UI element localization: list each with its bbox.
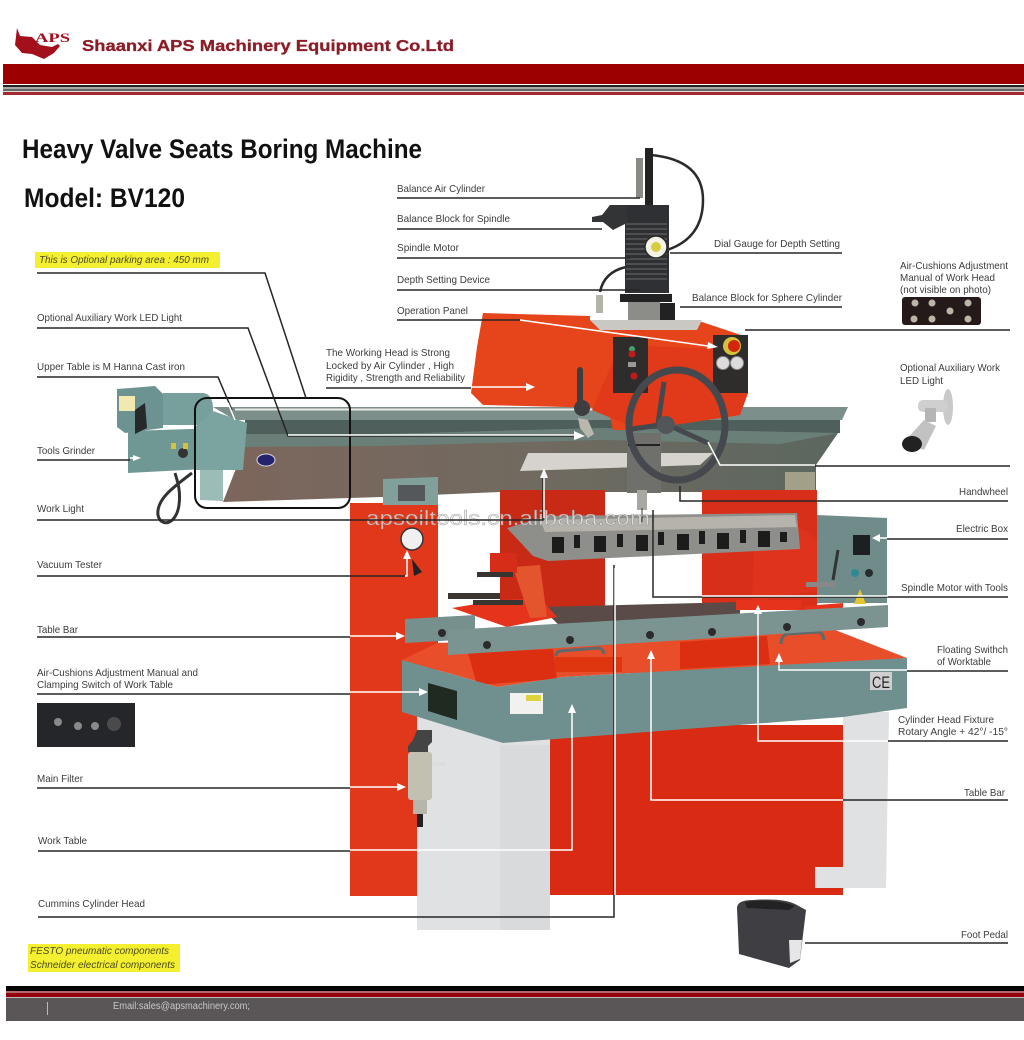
label: cummins cylinder head xyxy=(38,565,615,917)
label: LED light second line: LED Light xyxy=(900,375,943,387)
label: optional LED light: Optional Auxiliary Work xyxy=(900,362,1001,374)
right labels and leaders xyxy=(647,238,1010,943)
icon: LED work light xyxy=(902,389,953,452)
work table xyxy=(402,628,907,930)
label: air cushions worktable: Air-Cushions Adjustment Manual and xyxy=(37,667,198,679)
label: spindle motor with tools: Spindle Motor with Tools xyxy=(901,582,1008,594)
label: tools grinder: Tools Grinder xyxy=(37,445,95,457)
icon: worktable switch panel xyxy=(37,703,135,747)
label: air cushions work head: Air-Cushions Adjustment xyxy=(900,260,1008,272)
top labels and leaders xyxy=(326,183,718,391)
label: foot pedal: Foot Pedal xyxy=(961,929,1008,941)
cylinder head fixture xyxy=(448,521,843,627)
label: spindle motor with tools xyxy=(653,510,1008,597)
icon: work head switch panel xyxy=(902,297,981,325)
label: cylinder head fixture: Cylinder Head Fixture xyxy=(898,714,994,726)
label: table bar left: Table Bar xyxy=(37,624,78,636)
label: operation panel xyxy=(397,305,718,349)
red columns xyxy=(350,477,817,896)
dial gauge xyxy=(645,236,667,258)
leader: LED light xyxy=(708,442,1010,466)
label: electric box: Electric Box xyxy=(956,523,1009,535)
label: work light: Work Light xyxy=(37,503,84,515)
label: handwheel xyxy=(680,486,1008,501)
main filter xyxy=(408,730,446,827)
label: floating switch: of Worktable xyxy=(937,656,991,668)
label: cylinder head fixture xyxy=(754,605,1008,741)
label: balance block sphere cylinder: Balance Block for Sphere Cylinder xyxy=(692,292,842,304)
components callout: FESTO pneumatic components xyxy=(30,945,170,957)
label: working head: Rigidity , Strength and Reliability xyxy=(326,372,466,384)
left labels and leaders xyxy=(28,252,615,972)
label: air cushions work head: Manual of Work Head xyxy=(900,272,995,284)
label: air cushions worktable xyxy=(37,667,428,696)
label: LED light xyxy=(37,312,585,440)
title: Heavy Valve Seats Boring Machine xyxy=(22,134,422,164)
parking area callout xyxy=(35,252,306,398)
label: air cushions worktable: Clamping Switch of Work Table xyxy=(37,679,173,691)
components callout: Schneider electrical components xyxy=(30,959,176,971)
footer band xyxy=(6,986,1024,1021)
label: floating switch: Floating Swithch xyxy=(937,644,1008,656)
footer email: Email:sales@apsmachinery.com; xyxy=(113,1001,250,1012)
label: working head: The Working Head is Strong xyxy=(326,347,450,359)
label: balance air cylinder: Balance Air Cylinder xyxy=(397,183,485,195)
label: cylinder head fixture: Rotary Angle + 42°/ -15° xyxy=(898,726,1008,738)
label: electric box xyxy=(872,523,1009,542)
label: balance block for spindle: Balance Block for Spindle xyxy=(397,213,510,225)
electric box xyxy=(817,515,887,604)
label: work table xyxy=(38,704,576,851)
label: spindle motor: Spindle Motor xyxy=(397,242,459,254)
components callout xyxy=(28,944,180,972)
label: cummins cylinder head: Cummins Cylinder Head xyxy=(38,898,145,910)
table back strip xyxy=(540,602,740,626)
label: work light xyxy=(37,468,548,520)
label: vacuum tester: Vacuum Tester xyxy=(37,559,102,571)
tools grinder xyxy=(117,386,223,523)
optional area outline xyxy=(195,398,350,508)
parking area callout: This is Optional parking area : 450 mm xyxy=(39,254,209,266)
foot pedal xyxy=(737,900,806,968)
orange plate xyxy=(785,472,815,490)
label: main filter xyxy=(37,773,406,791)
company name: Shaanxi APS Machinery Equipment Co.Ltd xyxy=(82,38,454,55)
machine illustration xyxy=(117,148,907,968)
work light reflector xyxy=(520,453,713,471)
spindle with tooling xyxy=(627,433,661,522)
label: upper table: Upper Table is M Hanna Cast iron xyxy=(37,361,185,373)
table bars xyxy=(405,605,888,655)
label: tools grinder xyxy=(37,445,141,461)
label: LED light: Optional Auxiliary Work LED Light xyxy=(37,312,182,324)
label: table bar right: Table Bar xyxy=(964,787,1005,799)
label: air cushions work head: (not visible on photo) xyxy=(900,284,991,296)
working head xyxy=(471,313,748,438)
label: handwheel: Handwheel xyxy=(959,486,1008,498)
header band xyxy=(3,28,1024,95)
label: table bar right xyxy=(647,650,1008,800)
label: upper table xyxy=(37,361,235,420)
icon: APS logo: APS xyxy=(35,30,70,45)
label: vacuum tester xyxy=(37,550,411,576)
label: work table: Work Table xyxy=(38,835,87,847)
icon: APS logo xyxy=(15,28,70,59)
label: floating switch xyxy=(775,644,1008,671)
label: working head xyxy=(326,347,535,391)
red header bar xyxy=(3,64,1024,95)
label: main filter: Main Filter xyxy=(37,773,83,785)
work table: CE xyxy=(872,673,890,692)
watermark: apsoiltools.cn.alibaba.com xyxy=(366,508,650,530)
model: Model: BV120 xyxy=(24,183,185,213)
label: operation panel: Operation Panel xyxy=(397,305,468,317)
handwheel xyxy=(629,370,725,480)
label: table bar left xyxy=(37,624,405,640)
label: dial gauge: Dial Gauge for Depth Setting xyxy=(714,238,840,250)
worktop beam xyxy=(195,407,848,502)
label: air cushions work head xyxy=(745,260,1010,330)
label: depth setting device: Depth Setting Device xyxy=(397,274,490,286)
cylinder head xyxy=(507,513,800,561)
label: working head: Locked by Air Cylinder , High xyxy=(326,360,454,372)
spindle column xyxy=(592,148,703,322)
